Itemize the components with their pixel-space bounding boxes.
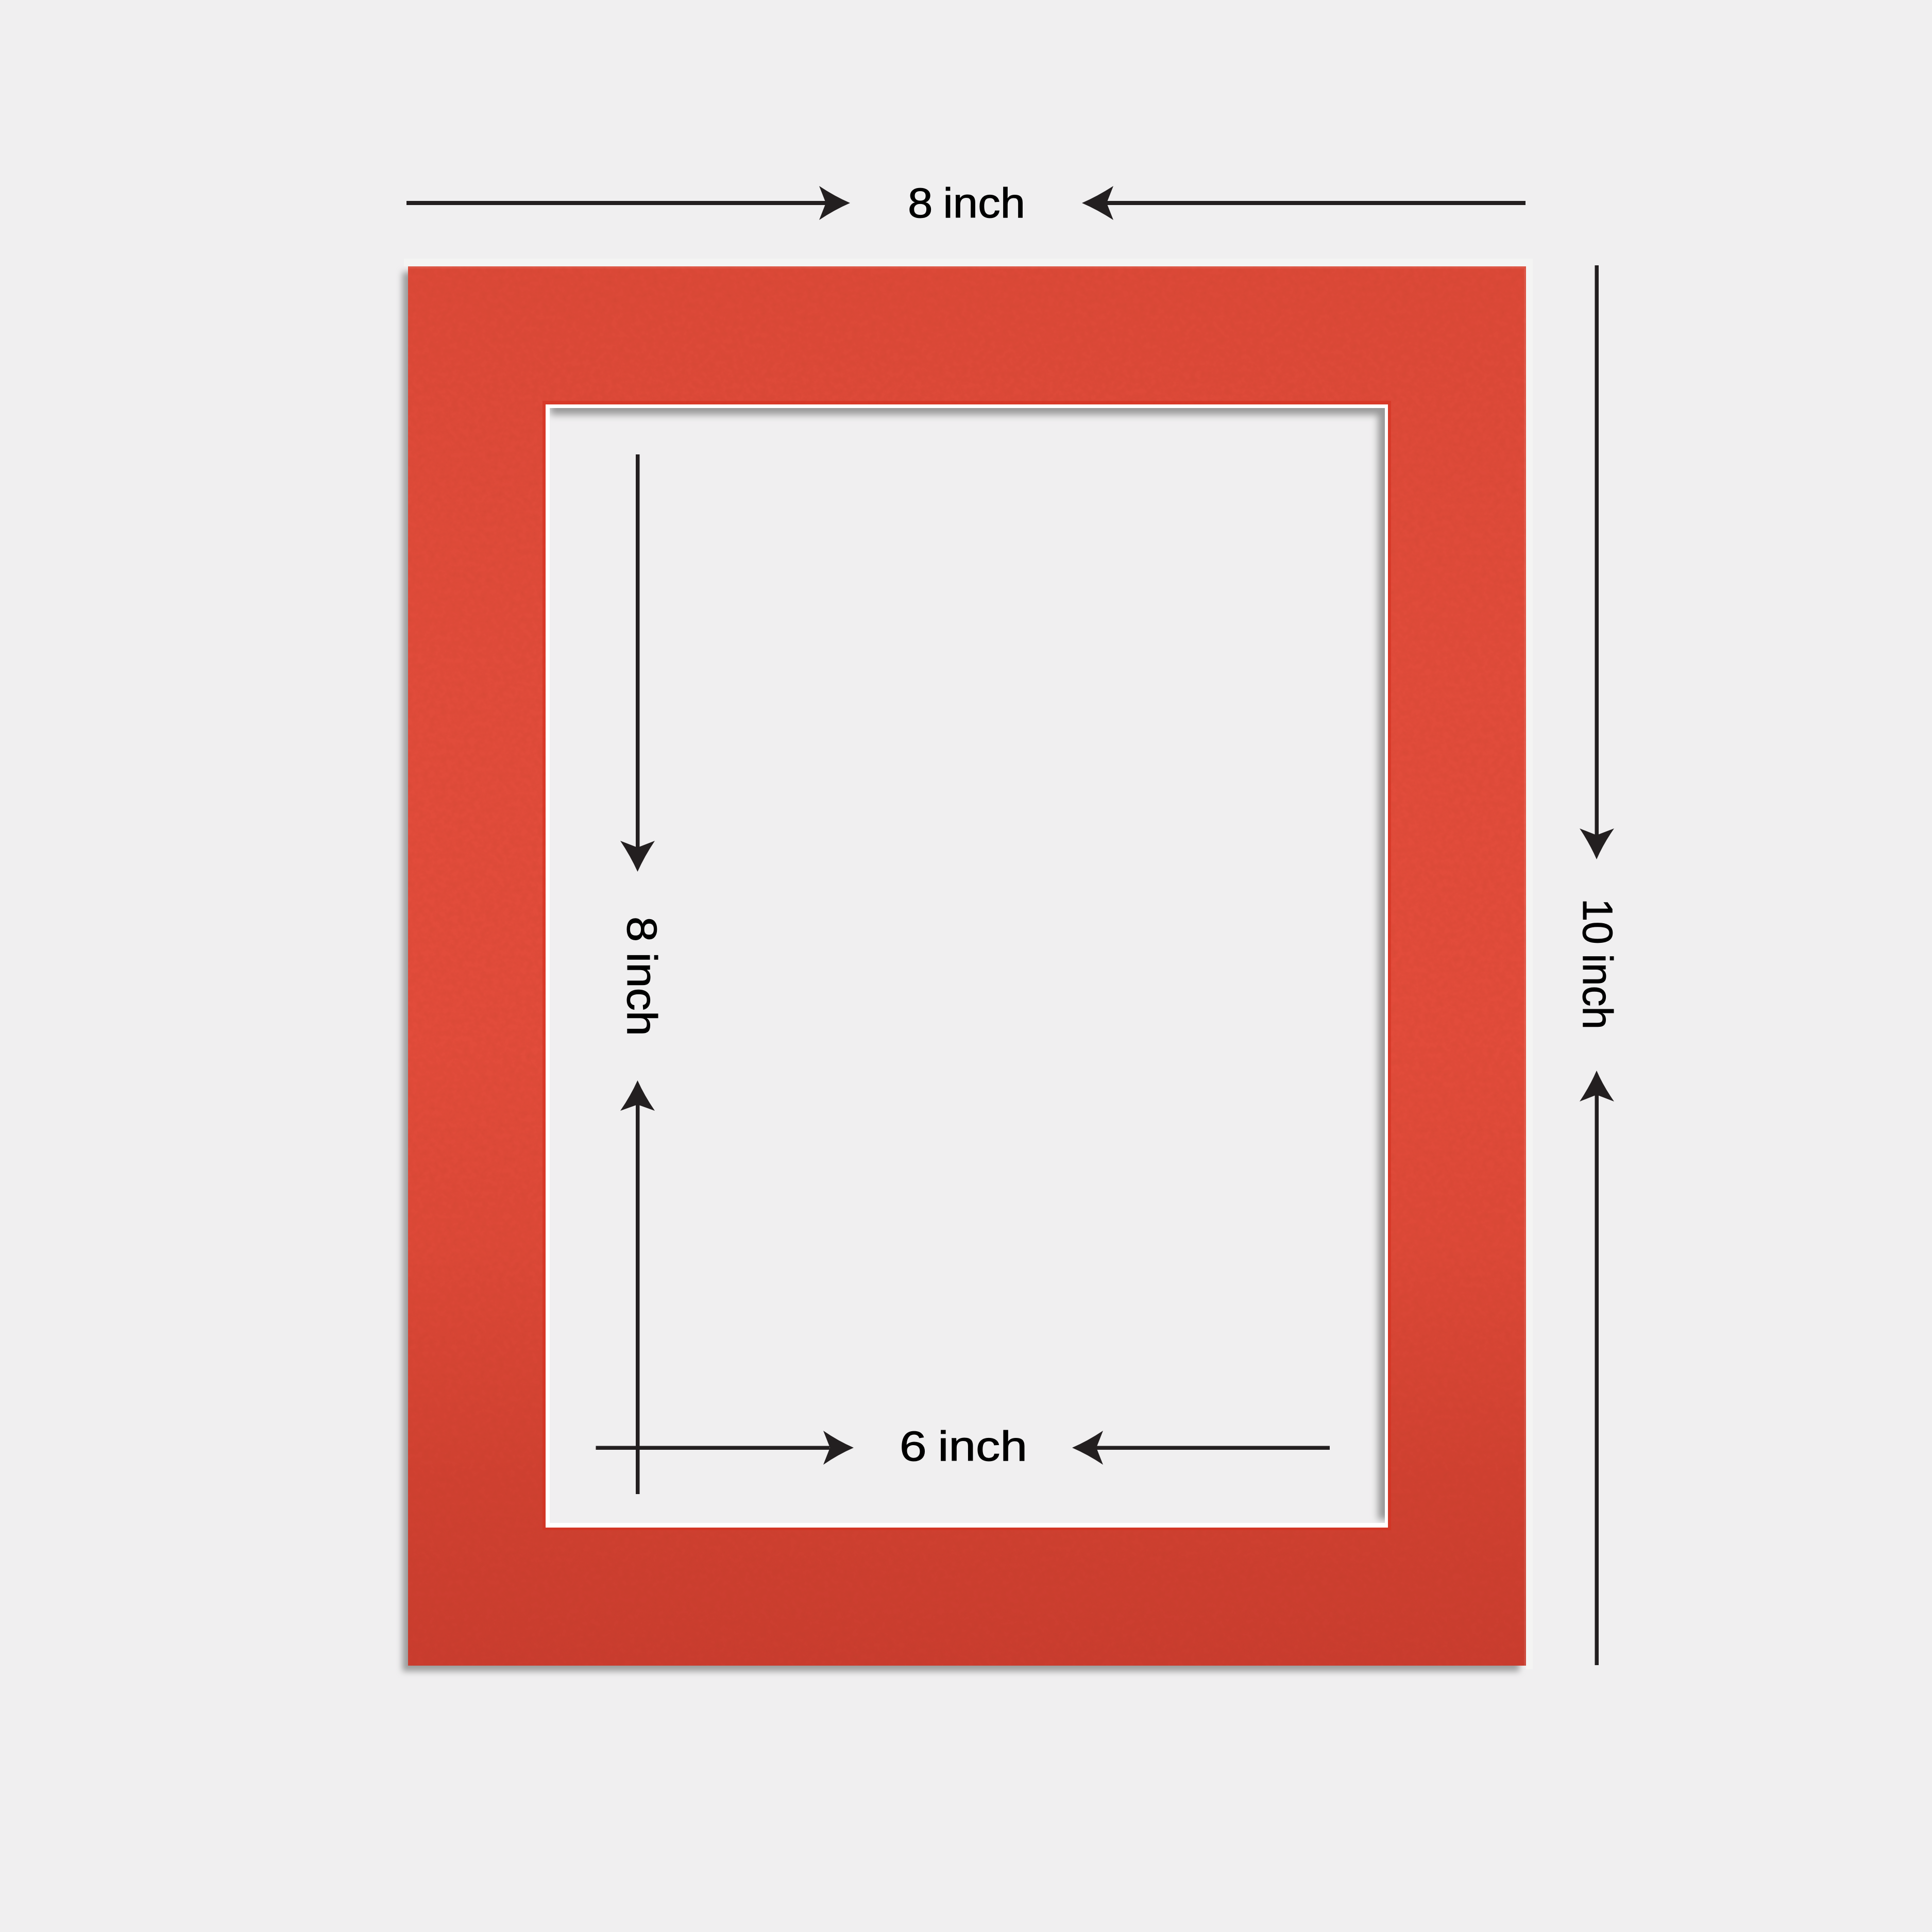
window opening — [550, 408, 1385, 1523]
arrow: inner width left — [596, 1431, 854, 1465]
arrow: inner height bottom — [620, 1080, 655, 1494]
mat glow edge — [404, 259, 1533, 1669]
arrow: top right — [1082, 186, 1526, 220]
mat outer edge highlight — [408, 266, 1526, 1666]
window inner shadow — [550, 400, 1392, 1520]
label: opening width 6 inch: 6 inch — [900, 1423, 1027, 1470]
white window bevel — [546, 404, 1388, 1528]
diagram: photo mat with dimensions — [399, 186, 1614, 1675]
arrow: inner width right — [1072, 1431, 1330, 1465]
arrow: right side bottom — [1580, 1071, 1614, 1665]
label: mat height 10 inch: 10 inch — [1574, 899, 1621, 1029]
mat board — [408, 266, 1526, 1666]
label: mat width 8 inch: 8 inch — [908, 180, 1025, 227]
mat paper grain — [408, 266, 1526, 1666]
arrow: inner height top — [620, 454, 655, 872]
arrow: right side top — [1580, 265, 1614, 859]
window cut edge — [543, 401, 1391, 1530]
arrow: top left — [406, 186, 850, 220]
label: opening height 8 inch: 8 inch — [618, 917, 665, 1036]
panel: red photo mat — [402, 259, 1533, 1671]
mat drop shadow — [402, 272, 1519, 1671]
